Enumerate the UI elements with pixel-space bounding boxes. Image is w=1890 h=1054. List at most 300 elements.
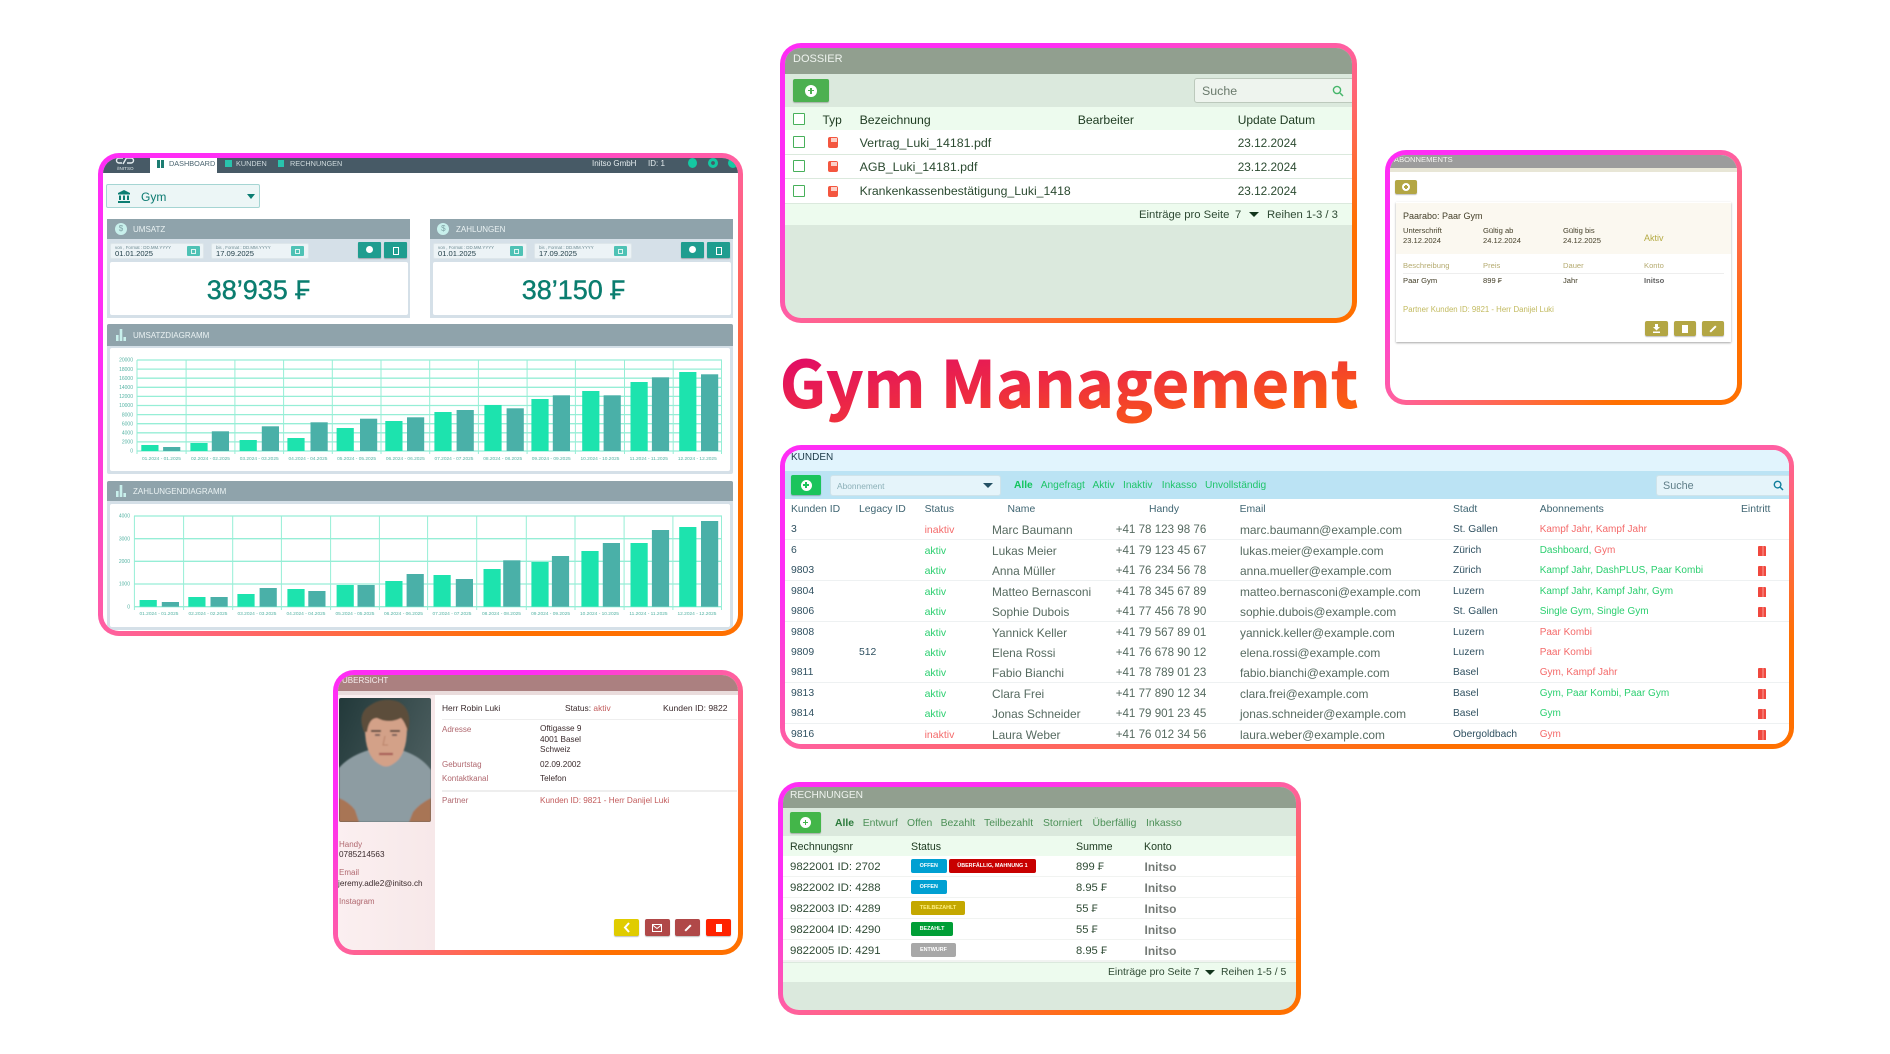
row: invoice 4289: 9822003 ID: 4289 [790, 903, 881, 915]
row: invoice 4290: BEZAHLT [920, 926, 944, 932]
bar chart: payments: 3000 [119, 536, 130, 542]
row: customer 9814: jonas.schneider@example.com [1240, 707, 1406, 721]
date hint: von , Format : DD.MM.YYYY [438, 245, 494, 250]
bar chart: revenue: 4000 [122, 430, 133, 436]
row: customer 9816: Gym [1540, 729, 1561, 740]
row: invoice 4290: Initso [1144, 923, 1176, 937]
bar chart: revenue: 8000 [122, 412, 133, 418]
value box [110, 262, 408, 315]
date: 23.12.2024 [1238, 160, 1297, 174]
tab: all: Alle [835, 818, 854, 828]
row: customer 6: Dashboard, Gym [1540, 545, 1615, 556]
page size arrow [1249, 212, 1259, 217]
bar chart: revenue: 07.2024 - 07.2025 [435, 456, 474, 462]
button: add subscription [1395, 180, 1417, 194]
value: signature: 23.12.2024 [1403, 236, 1441, 245]
row: invoice 4288: Initso [1144, 881, 1176, 895]
row: invoice 4291: 8.95 ₣ [1076, 945, 1107, 957]
button: add document [793, 79, 829, 102]
button: mail [645, 919, 670, 936]
row: invoice 4291: Initso [1144, 944, 1176, 958]
date hint: von , Format : DD.MM.YYYY [115, 245, 171, 250]
row: customer 9804: Matteo Bernasconi [992, 585, 1091, 599]
button: reset [358, 242, 381, 258]
bar chart: payments: 11.2024 - 11.2025 [629, 611, 668, 617]
row: customer 9803: 9803 [791, 565, 814, 576]
header bar [1390, 155, 1737, 172]
panel: invoices [778, 782, 1301, 1015]
bar chart: payments: 12.2024 - 12.2025 [678, 611, 717, 617]
icon: calendar [510, 246, 523, 256]
value: duration: Jahr [1563, 276, 1578, 285]
icon: power [728, 158, 738, 168]
row: customer 9806: +41 77 456 78 90 [1116, 605, 1206, 618]
row: customer 9813: aktiv [925, 688, 946, 700]
value: partner: Kunden ID: 9821 - Herr Danijel Luki [540, 796, 669, 805]
value: account: Initso [1644, 276, 1664, 285]
column: invoice number: Rechnungsnr [790, 841, 853, 853]
bar chart: payments: 06.2024 - 06.2025 [384, 611, 423, 617]
subscription name: Paarabo: Paar Gym [1403, 211, 1483, 221]
row: customer 9813: Clara Frei [992, 687, 1044, 701]
tab: incomplete: Unvollständig [1205, 480, 1266, 491]
column: account: Konto [1144, 841, 1172, 853]
column: type: Typ [822, 112, 842, 126]
row: contract [785, 130, 1352, 154]
row: customer 9804 [785, 581, 1789, 602]
row: customer 9813: Basel [1453, 688, 1478, 699]
column: updated: Update Datum [1238, 112, 1315, 126]
row: customer 9808: 9808 [791, 627, 814, 638]
label: valid until: Gültig bis [1563, 226, 1595, 235]
table header: Email [1240, 504, 1266, 515]
bar chart: payments: 2000 [119, 559, 130, 565]
row: customer 9804: Luzern [1453, 586, 1484, 597]
subscription card [1396, 202, 1731, 342]
row: invoice 4288 [783, 877, 1297, 899]
value: phone: 0785214563 [339, 850, 385, 859]
bar chart: payments: 09.2024 - 09.2025 [531, 611, 570, 617]
label: instagram: Instagram [339, 897, 375, 906]
date value: 01.01.2025 [438, 249, 476, 258]
button: export [384, 242, 407, 258]
customer status: Status: aktiv [565, 703, 611, 713]
column: status: Status [911, 841, 941, 853]
row: invoice 4291: 9822005 ID: 4291 [790, 945, 881, 957]
header bar [338, 675, 738, 695]
row: customer 9809: Paar Kombi [1540, 647, 1592, 658]
row: customer 9808: Paar Kombi [1540, 627, 1592, 638]
file name: AGB_Luki_14181.pdf [860, 160, 977, 174]
nav label: dashboard: DASHBOARD [169, 159, 215, 168]
row: customer 6: Zürich [1453, 545, 1481, 556]
label: signature: Unterschrift [1403, 226, 1442, 235]
icon: building [118, 190, 130, 203]
date hint: bis , Format : DD.MM.YYYY [216, 245, 271, 250]
bar chart: payments: 08.2024 - 08.2025 [482, 611, 521, 617]
bar chart: revenue: 09.2024 - 09.2025 [532, 456, 571, 462]
column: name: Bezeichnung [860, 112, 931, 126]
row: customer 3: inaktiv [925, 524, 954, 536]
payments figure: 38’150 ₣ [522, 275, 625, 305]
search field [1656, 475, 1791, 496]
row: customer 9811: aktiv [925, 667, 946, 679]
header bar [785, 450, 1789, 471]
header bar [785, 48, 1352, 74]
row: customer 9814: Basel [1453, 708, 1478, 719]
row: customer 9806: sophie.dubois@example.com [1240, 605, 1396, 619]
card header [107, 324, 733, 346]
search placeholder: Suche [1663, 480, 1694, 492]
photo: customer portrait [339, 698, 431, 822]
icon: settings [708, 158, 718, 168]
row: customer 9814 [785, 703, 1789, 724]
icon: shield [688, 158, 697, 168]
row: invoice 4288: OFFEN [920, 884, 938, 890]
row: customer 9808: +41 79 567 89 01 [1116, 626, 1206, 639]
icon: calendar [291, 246, 304, 256]
row: customer 9809 [785, 642, 1789, 663]
filter placeholder: Abonnement [837, 481, 884, 491]
icon: chevron [624, 922, 630, 933]
icon: pdf [828, 186, 838, 197]
row: customer 9814: 9814 [791, 708, 814, 719]
row: customer 6: +41 79 123 45 67 [1116, 544, 1206, 557]
customer name: Herr Robin Luki [442, 703, 500, 713]
row: invoice 2702: 899 ₣ [1076, 861, 1104, 873]
bar chart: revenue: 10000 [119, 403, 133, 409]
label: contact channel: Kontaktkanal [442, 774, 488, 783]
icon: download [1653, 324, 1660, 333]
heading: customers: KUNDEN [791, 452, 833, 463]
label: price: Preis [1483, 261, 1500, 270]
label: email: Email [339, 868, 359, 877]
row: customer 9803: Kampf Jahr, DashPLUS, Paar Kombi [1540, 565, 1703, 576]
table header: Abonnements [1540, 504, 1604, 515]
row: customer 9816: inaktiv [925, 729, 954, 741]
bar chart: revenue: 06.2024 - 06.2025 [386, 456, 425, 462]
card summary [1396, 203, 1731, 254]
row: customer 9808: yannick.keller@example.com [1240, 626, 1395, 640]
row: customer 3: 3 [791, 524, 797, 535]
value: description: Paar Gym [1403, 276, 1437, 285]
bar chart: payments: 4000 [119, 514, 130, 520]
panel: subscriptions [1385, 150, 1742, 405]
heading: invoices: RECHNUNGEN [790, 790, 863, 801]
row: customer 9816: +41 76 012 34 56 [1116, 728, 1206, 741]
table header: Stadt [1453, 504, 1477, 515]
tab: cancelled: Storniert [1043, 818, 1082, 828]
bar chart: revenue: 20000 [119, 358, 133, 364]
row: invoice 4289 [783, 898, 1297, 920]
row: customer 9804: matteo.bernasconi@example.com [1240, 585, 1421, 599]
bar chart: revenue: 0 [130, 449, 133, 455]
panel: customers [780, 445, 1794, 749]
page size: 7 [1194, 967, 1199, 978]
row: customer 9803: +41 76 234 56 78 [1116, 564, 1206, 577]
button: delete [706, 919, 731, 936]
label: valid from: Gültig ab [1483, 226, 1513, 235]
table header [785, 499, 1789, 519]
icon: dashboard [157, 160, 164, 168]
heading: revenue chart: UMSATZDIAGRAMM [133, 330, 209, 340]
icon: calendar [187, 246, 200, 256]
card: payments [430, 219, 733, 318]
chart panel [110, 348, 730, 471]
heading: subscriptions: ABONNEMENTS [1394, 155, 1453, 164]
button: document [1674, 321, 1696, 336]
row: customer 3 [785, 519, 1789, 540]
label: description: Beschreibung [1403, 261, 1449, 270]
row: customer 9816: laura.weber@example.com [1240, 728, 1385, 742]
row: customer 9806: Single Gym, Single Gym [1540, 606, 1649, 617]
row: invoice 4288: 8.95 ₣ [1076, 882, 1107, 894]
entries per page: Einträge pro Seite [1139, 209, 1229, 221]
row: insurance [785, 179, 1352, 203]
panel: customer overview [333, 670, 743, 955]
row: customer 6: 6 [791, 545, 797, 556]
row: customer 6: Lukas Meier [992, 544, 1057, 558]
file name: Vertrag_Luki_14181.pdf [860, 136, 991, 150]
row: customer 9813: clara.frei@example.com [1240, 687, 1368, 701]
row: invoice 4289: 55 ₣ [1076, 903, 1098, 915]
row: customer 9813: Gym, Paar Kombi, Paar Gym [1540, 688, 1669, 699]
tab: all: Alle [1014, 480, 1033, 491]
date to [211, 243, 309, 259]
row: invoice 4290 [783, 919, 1297, 941]
value: price: 899 ₣ [1483, 276, 1502, 285]
partner note: Partner Kunden ID: 9821 - Herr Danijel Luki [1403, 304, 1554, 314]
button: back [614, 919, 639, 936]
card header [107, 481, 733, 501]
bar chart: revenue: 11.2024 - 11.2025 [630, 456, 668, 462]
search field [1194, 78, 1354, 103]
row: customer 6: aktiv [925, 545, 946, 557]
heading: payments chart: ZAHLUNGENDIAGRAMM [133, 487, 226, 496]
row: customer 9803: anna.mueller@example.com [1240, 564, 1392, 578]
tab: overdue: Überfällig [1092, 818, 1136, 828]
label: address: Adresse [442, 725, 471, 734]
row: customer 9808: Yannick Keller [992, 626, 1067, 640]
row: customer 9811 [785, 662, 1789, 683]
value: contact channel: Telefon [540, 774, 566, 783]
bar chart: payments: 07.2024 - 07.2025 [433, 611, 472, 617]
icon: invoices [278, 160, 284, 167]
icon: magnifier [1774, 480, 1784, 490]
table footer [785, 204, 1352, 225]
row: customer 9813: +41 77 890 12 34 [1116, 687, 1206, 700]
row: customer 3: marc.baumann@example.com [1240, 523, 1402, 537]
button: download [1645, 321, 1668, 336]
row: terms [785, 155, 1352, 178]
table header: Handy [1149, 504, 1179, 515]
row: customer 9806: aktiv [925, 606, 946, 618]
bar chart: revenue: 2000 [122, 440, 133, 446]
bar chart: revenue: 04.2024 - 04.2025 [289, 456, 328, 462]
card header [430, 219, 733, 239]
bar chart: payments: 04.2024 - 04.2025 [287, 611, 326, 617]
account id: ID: 1 [648, 159, 665, 168]
tab: active: Aktiv [1092, 480, 1115, 491]
column: amount: Summe [1076, 841, 1112, 853]
icon: trash [716, 924, 722, 932]
tab: collection: Inkasso [1146, 818, 1182, 828]
row: customer 9803: Anna Müller [992, 564, 1055, 578]
row: customer 9811: 9811 [791, 667, 813, 678]
button: edit [675, 919, 700, 936]
icon: document [1682, 324, 1688, 332]
button: add invoice [790, 812, 821, 833]
row: invoice 2702: ÜBERFÄLLIG, MAHNUNG 1 [957, 863, 1028, 869]
search placeholder: Suche [1202, 84, 1237, 98]
checkbox [793, 160, 805, 172]
row: customer 9804: Kampf Jahr, Kampf Jahr, Gym [1540, 586, 1673, 597]
bar chart: revenue: 02.2024 - 02.2025 [191, 456, 230, 462]
row: customer 9809: aktiv [925, 647, 946, 659]
panel: dashboard [98, 153, 743, 636]
icon: mail [652, 924, 662, 932]
row: customer 9806: Sophie Dubois [992, 605, 1069, 619]
heading: dossier: DOSSIER [793, 53, 843, 65]
row: invoice 2702: 9822001 ID: 2702 [790, 861, 881, 873]
logo text: /INITSO [117, 166, 134, 171]
bar chart: revenue: 18000 [119, 367, 133, 373]
card: revenue chart [107, 324, 733, 474]
nav label: customers: KUNDEN [236, 159, 267, 168]
contact sidebar [338, 695, 435, 950]
tab: inactive: Inaktiv [1123, 480, 1152, 491]
icon: logo [116, 158, 134, 164]
row: customer 9808: aktiv [925, 627, 946, 639]
bar chart: payments: 10.2024 - 10.2025 [580, 611, 619, 617]
icon: customers [225, 160, 232, 167]
button: add customer [791, 475, 821, 495]
subscription filter [830, 475, 1001, 496]
table footer [783, 963, 1297, 982]
row: customer 9814: Jonas Schneider [992, 707, 1081, 721]
row: invoice 4291: ENTWURF [920, 947, 947, 953]
page size arrow [1205, 970, 1215, 975]
value: email: jeremy.adle2@initso.ch [338, 879, 423, 888]
date to [534, 243, 632, 259]
bar chart: payments: 03.2024 - 03.2025 [238, 611, 277, 617]
bar chart: revenue: 12000 [119, 394, 133, 400]
date: 23.12.2024 [1238, 136, 1297, 150]
selector arrow [247, 194, 255, 199]
date value: 17.09.2025 [216, 249, 254, 258]
bar chart: payments: 01.2024 - 01.2025 [140, 611, 179, 617]
row: invoice 4289: TEILBEZAHLT [920, 905, 956, 911]
row: customer 9809: 9809 [791, 647, 814, 658]
row: customer 6: lukas.meier@example.com [1240, 544, 1384, 558]
customer id: Kunden ID: 9822 [663, 703, 728, 713]
value: valid until: 24.12.2025 [1563, 236, 1601, 245]
icon: pencil [684, 924, 691, 931]
row: customer 9816: 9816 [791, 729, 814, 740]
revenue figure: 38’935 ₣ [207, 275, 310, 305]
table header [783, 836, 1297, 856]
row: customer 9816: Laura Weber [992, 728, 1061, 742]
icon: magnifier [1332, 86, 1344, 96]
row count: Reihen 1-3 / 3 [1267, 209, 1338, 221]
row: customer 9809: elena.rossi@example.com [1240, 646, 1380, 660]
row: customer 9811: Fabio Bianchi [992, 666, 1064, 680]
nav label: invoices: RECHNUNGEN [290, 159, 342, 168]
row: invoice 4289: Initso [1144, 902, 1176, 916]
active tab: dashboard [150, 158, 217, 173]
icon: pdf [828, 161, 838, 172]
date from [110, 243, 204, 259]
filter arrow [983, 483, 993, 488]
tab: draft: Entwurf [863, 818, 898, 828]
checkbox [793, 185, 805, 197]
row count: Reihen 1-5 / 5 [1221, 967, 1286, 978]
icon: dollar: $ [119, 224, 123, 233]
row: invoice 4288: 9822002 ID: 4288 [790, 882, 881, 894]
button: export [707, 242, 730, 258]
bar chart: payments: 0 [127, 604, 130, 610]
row: invoice 4290: 55 ₣ [1076, 924, 1098, 936]
card header [107, 219, 410, 239]
bar chart: revenue: 6000 [122, 421, 133, 427]
row: customer 9806: St. Gallen [1453, 606, 1498, 617]
row: customer 9811: +41 78 789 01 23 [1116, 666, 1206, 679]
icon: dollar [437, 223, 449, 235]
icon: pdf [828, 137, 838, 148]
tab: paid: Bezahlt [941, 818, 975, 828]
bar chart: payments: 02.2024 - 02.2025 [189, 611, 228, 617]
panel: dossier [780, 43, 1357, 323]
icon: bars [116, 329, 126, 341]
heading: overview: ÜBERSICHT [342, 676, 388, 685]
row: invoice 2702 [783, 856, 1297, 878]
label: account: Konto [1644, 261, 1664, 270]
icon: pencil [1709, 325, 1717, 332]
row: customer 9813: 9813 [791, 688, 814, 699]
checkbox: all [793, 113, 805, 125]
heading: payments: ZAHLUNGEN [456, 225, 505, 234]
row: customer 9806 [785, 601, 1789, 622]
row: customer 9804: 9804 [791, 586, 814, 597]
row: customer 9813 [785, 683, 1789, 704]
row: customer 9816 [785, 724, 1789, 745]
row: invoice 4290: 9822004 ID: 4290 [790, 924, 881, 936]
date value: 17.09.2025 [539, 249, 577, 258]
row: customer 9809: 512 [859, 647, 876, 658]
row: customer 9806: 9806 [791, 606, 814, 617]
selector text: Gym [141, 190, 166, 204]
tab: partially paid: Teilbezahlt [984, 818, 1033, 828]
header bar [783, 787, 1297, 808]
row: invoice 4291 [783, 940, 1297, 962]
icon: bars [116, 485, 126, 497]
label: duration: Dauer [1563, 261, 1584, 270]
date hint: bis , Format : DD.MM.YYYY [539, 245, 594, 250]
value: address: Oftigasse 9 4001 Basel Schweiz [540, 724, 581, 754]
button: reset [681, 242, 704, 258]
row: customer 3: St. Gallen [1453, 524, 1498, 535]
row: customer 9809: Luzern [1453, 647, 1484, 658]
row: customer 9809: Elena Rossi [992, 646, 1055, 660]
row: customer 3: Kampf Jahr, Kampf Jahr [1540, 524, 1647, 535]
label: birthday: Geburtstag [442, 760, 482, 769]
tab: requested: Angefragt [1041, 480, 1085, 491]
row: invoice 2702: Initso [1144, 860, 1176, 874]
table header: Eintritt [1741, 504, 1770, 515]
heading: revenue: UMSATZ [133, 225, 165, 234]
row: customer 9811: Gym, Kampf Jahr [1540, 667, 1618, 678]
bar chart: revenue: 14000 [119, 385, 133, 391]
